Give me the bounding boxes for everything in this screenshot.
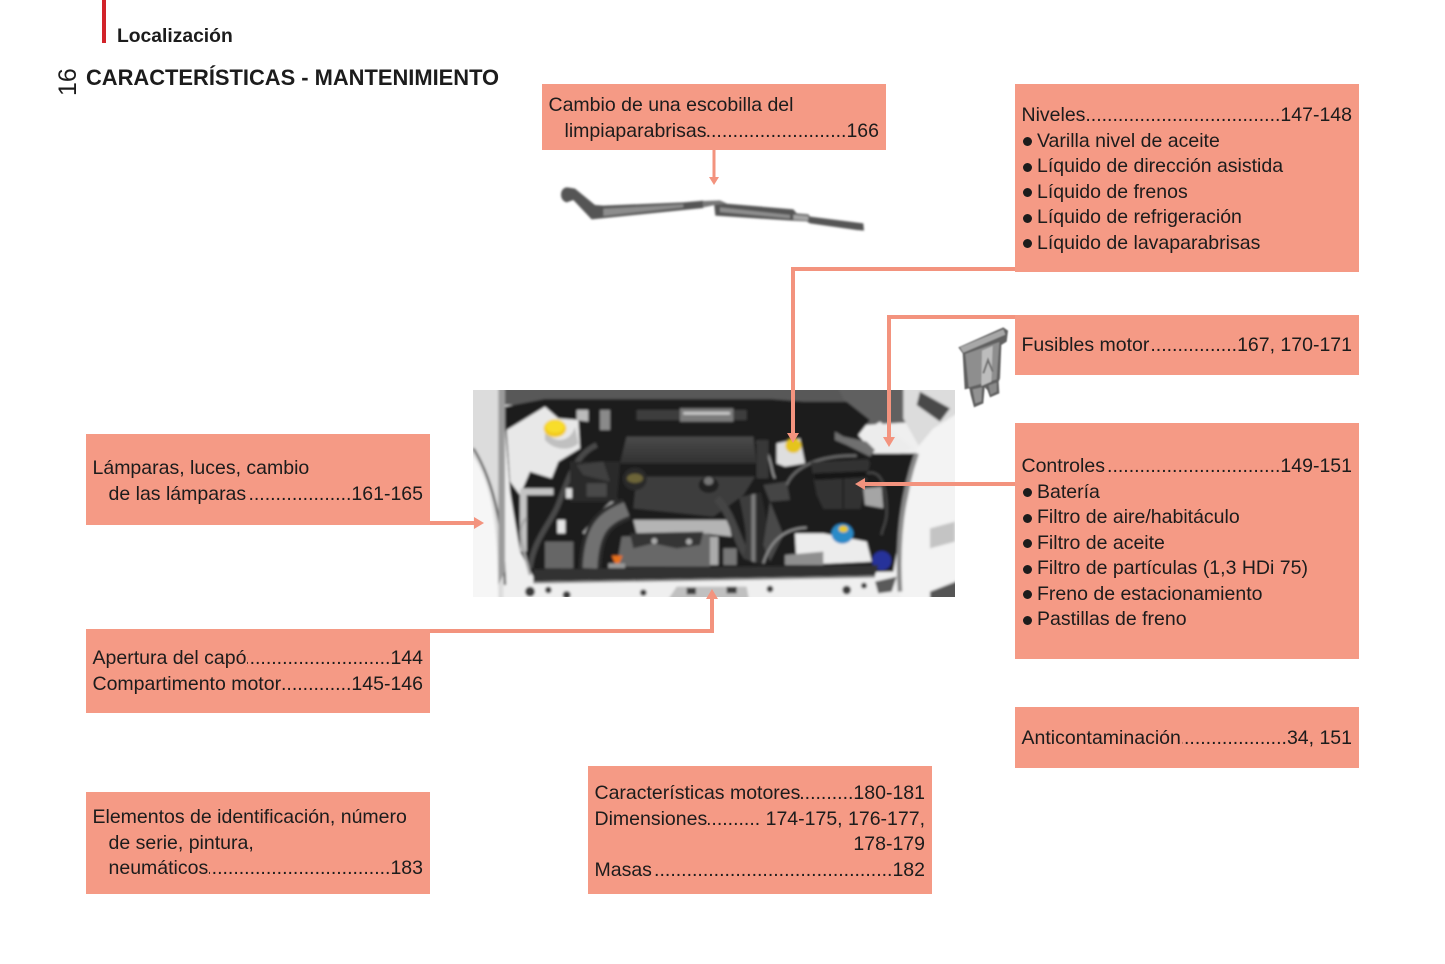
text: lamps page reference: de las lámparas — [108, 482, 246, 504]
turbo pipes — [720, 505, 746, 556]
panel: emissions control: Anticontaminación — [1022, 727, 1181, 749]
oil filler orange — [612, 556, 623, 563]
panel: checks — [1015, 423, 1359, 659]
panel: checks: 149-151 — [1280, 455, 1352, 477]
panel: levels: Líquido de lavaparabrisas — [1037, 232, 1260, 254]
panel: identification: Elementos de identificación, número — [92, 806, 407, 828]
left reservoir — [507, 407, 580, 495]
panel: identification: 183 — [390, 857, 423, 879]
page number: 16 — [54, 68, 82, 96]
panel: levels — [1015, 84, 1359, 272]
panel: checks: Filtro de aceite — [1037, 532, 1165, 554]
panel: checks: Filtro de partículas (1,3 HDi 75) — [1037, 557, 1308, 579]
panel: engine specifications: Dimensiones — [594, 808, 707, 830]
brake reservoir — [777, 438, 805, 467]
panel: bonnet opening: Apertura del capó — [92, 647, 246, 669]
panel: bonnet opening: Compartimento motor — [92, 672, 281, 694]
engine bay photo — [473, 390, 955, 597]
coolant reservoir — [795, 533, 872, 565]
panel: engine fuses: Fusibles motor — [1022, 334, 1149, 356]
panel: bonnet opening: 145-146 — [351, 672, 423, 694]
text: lamps page reference: 161-165 — [351, 482, 423, 504]
icon: wiper arm and blade — [560, 186, 866, 232]
wiring and left side hoses — [530, 445, 597, 568]
text: wiper page reference: limpiaparabrisas — [564, 120, 706, 142]
icon: fuse — [958, 326, 1009, 408]
panel: checks: Controles — [1022, 455, 1105, 477]
panel: identification: neumáticos — [108, 857, 208, 879]
battery — [811, 459, 870, 509]
text: wiper page reference: 166 — [846, 120, 879, 142]
panel: wiper blade — [542, 84, 886, 150]
panel: engine specifications: 182 — [892, 858, 925, 880]
arrow: lamps — [430, 517, 484, 529]
panel: levels: Varilla nivel de aceite — [1037, 130, 1220, 152]
panel: lamps: Lámparas, luces, cambio — [92, 457, 309, 479]
panel: engine specifications: 174-175, 176-177, — [766, 808, 925, 830]
panel: engine fuses — [1015, 315, 1359, 375]
section label: Localización — [117, 26, 233, 47]
panel: engine specifications: Masas — [594, 858, 652, 880]
panel: checks: Freno de estacionamiento — [1037, 582, 1262, 604]
intake hose — [590, 509, 627, 568]
arrow: bonnet opening — [430, 589, 718, 633]
panel: engine specifications: Características motores — [594, 782, 800, 804]
engine cover — [620, 437, 757, 467]
panel: levels: Niveles — [1022, 104, 1085, 126]
text: wiper page reference — [564, 120, 879, 142]
header accent bar — [102, 0, 106, 43]
panel: engine specifications: 178-179 — [853, 833, 925, 855]
title: CARACTERÍSTICAS - MANTENIMIENTO — [86, 65, 499, 90]
arrow: wiper — [709, 150, 719, 185]
panel: identification — [86, 792, 430, 894]
text: lamps page reference — [108, 482, 423, 504]
panel: lamps — [86, 434, 430, 525]
panel: levels: 147-148 — [1280, 104, 1352, 126]
front cross member — [533, 565, 878, 582]
cylinder head and manifold — [633, 520, 732, 537]
panel: levels: Líquido de refrigeración — [1037, 206, 1242, 228]
panel: engine fuses: 167, 170-171 — [1237, 334, 1352, 356]
arrow: fuses — [883, 315, 1015, 447]
panel: checks: Filtro de aire/habitáculo — [1037, 506, 1240, 528]
panel: levels: Líquido de dirección asistida — [1037, 155, 1283, 177]
panel: identification: de serie, pintura, — [108, 832, 254, 854]
panel: wiper blade: Cambio de una escobilla del — [548, 94, 794, 116]
panel: engine specifications — [588, 766, 932, 894]
panel: emissions control — [1015, 707, 1359, 768]
panel: levels: Líquido de frenos — [1037, 180, 1188, 202]
panel: emissions control: 34, 151 — [1287, 727, 1352, 749]
top bay components — [600, 410, 610, 430]
arrow: levels to brake reservoir — [787, 267, 1015, 443]
panel: bonnet opening: 144 — [390, 647, 423, 669]
dark engine bay interior — [505, 399, 917, 577]
arrow: checks to battery — [855, 478, 1015, 490]
panel: engine specifications: 180-181 — [853, 782, 925, 804]
panel: checks: Batería — [1037, 480, 1100, 502]
panel: checks: Pastillas de freno — [1037, 608, 1187, 630]
panel: bonnet opening — [86, 629, 430, 713]
